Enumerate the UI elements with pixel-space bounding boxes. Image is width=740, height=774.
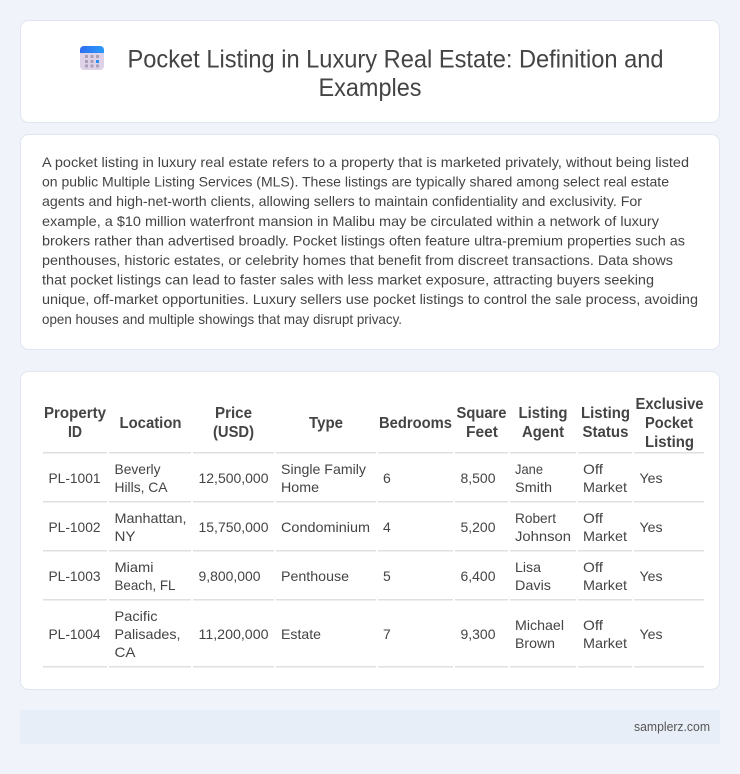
table row: PL-1001: Hills, CA	[114, 479, 168, 495]
footer	[20, 710, 720, 744]
table row: PL-1004: Off	[583, 617, 603, 633]
table row: PL-1004: 7	[383, 626, 391, 642]
table header row	[44, 396, 704, 451]
text block: description paragraph: brokers rather than advertised broadly. Pocket listings often feature ultra-premium properties such as	[42, 232, 685, 248]
table header row: Square	[456, 405, 507, 422]
title: Pocket Listing in Luxury Real Estate: Definition and	[128, 46, 664, 74]
table row: PL-1001: Smith	[515, 479, 552, 495]
table row: PL-1001: PL-1001	[48, 470, 101, 486]
table row: PL-1004: Brown	[515, 635, 555, 651]
table row: PL-1004: Palisades,	[114, 626, 180, 642]
table row: PL-1002: 15,750,000	[198, 519, 269, 535]
table row: PL-1003: 5	[383, 568, 391, 584]
table header row: Type	[309, 415, 343, 432]
table row: PL-1002: 5,200	[460, 519, 496, 535]
table row: PL-1002: Market	[583, 528, 627, 544]
table header row: Listing	[645, 434, 694, 451]
icon: calendar	[80, 46, 104, 70]
table row: PL-1004: Michael	[515, 617, 564, 633]
table row: PL-1004: 11,200,000	[198, 626, 269, 642]
table row: PL-1002: Robert	[515, 510, 556, 526]
table row: PL-1001	[48, 461, 662, 495]
table header row: Listing	[518, 405, 568, 422]
table row: PL-1004: Yes	[640, 626, 662, 642]
table row: PL-1003: Yes	[640, 568, 662, 584]
table row: PL-1001: 6	[383, 470, 391, 486]
panel: description	[20, 134, 720, 350]
text block: description paragraph: that pocket listings can lead to faster sales with less market exposure, attracting buyers seeking	[42, 272, 654, 288]
table header row: Location	[120, 415, 182, 432]
table row: PL-1001: Single Family	[281, 461, 366, 477]
text block: description paragraph: agents and high-net-worth clients, allowing sellers to maintain confidentiality and exclusivity. For	[42, 193, 642, 209]
table header row: Price	[215, 405, 252, 422]
table row: PL-1003: 9,800,000	[198, 568, 261, 584]
table row: PL-1002: Off	[583, 510, 603, 526]
table header row: Status	[582, 424, 629, 441]
text block: description paragraph	[42, 154, 698, 327]
title	[128, 46, 664, 102]
table row: PL-1004: Estate	[281, 626, 321, 642]
table row: PL-1001: Market	[583, 479, 627, 495]
table row: PL-1002: Yes	[640, 519, 662, 535]
panel: table	[20, 372, 720, 690]
table row: PL-1001: Yes	[640, 470, 662, 486]
footer: samplerz.com	[634, 720, 710, 734]
table row: PL-1003: Beach, FL	[114, 577, 176, 593]
table row: PL-1002: 4	[383, 519, 391, 535]
table header row: ID	[68, 424, 82, 441]
table row: PL-1004: Pacific	[114, 608, 158, 624]
text block: description paragraph: penthouses, historic estates, or celebrity homes that benefit from discreet transactions. Data shows	[42, 252, 673, 268]
table row: PL-1002	[48, 510, 662, 544]
table header row: Feet	[466, 424, 499, 441]
table row: PL-1004: 9,300	[460, 626, 496, 642]
table row: PL-1001: Home	[281, 479, 319, 495]
table header row: Pocket	[645, 415, 694, 432]
table row: PL-1002: Condominium	[281, 519, 370, 535]
table row: PL-1002: Johnson	[515, 528, 571, 544]
table header row: Property	[44, 405, 106, 422]
table row: PL-1002: NY	[114, 528, 136, 544]
table row: PL-1001: Beverly	[114, 461, 160, 477]
text block: description paragraph: unique, off-market opportunities. Luxury sellers use pocket listings to control the sale process, avoiding	[42, 291, 698, 307]
table row: PL-1004: Market	[583, 635, 627, 651]
table row: PL-1001: 8,500	[460, 470, 496, 486]
table row: PL-1003: Davis	[515, 577, 551, 593]
text block: description paragraph: A pocket listing in luxury real estate refers to a property that is marketed privately, without being listed	[42, 154, 689, 170]
table header row: Listing	[581, 405, 630, 422]
table row: PL-1004	[48, 608, 662, 660]
table row: PL-1002: Manhattan,	[114, 510, 186, 526]
table row: PL-1003: PL-1003	[48, 568, 101, 584]
table row: PL-1003: Lisa	[515, 559, 541, 575]
text block: description paragraph: example, a $10 million waterfront mansion in Malibu may be circulated within a network of luxury	[42, 213, 659, 229]
table row: PL-1004: CA	[114, 644, 136, 660]
table row: PL-1003: Miami	[114, 559, 154, 575]
table row: PL-1001: 12,500,000	[198, 470, 269, 486]
table row: PL-1001: Jane	[515, 461, 543, 477]
table row: PL-1003: 6,400	[460, 568, 496, 584]
table row: PL-1003: Off	[583, 559, 603, 575]
table row: PL-1002: PL-1002	[48, 519, 101, 535]
table row: PL-1004: PL-1004	[48, 626, 101, 642]
title: Examples	[318, 74, 422, 102]
table row: PL-1003: Penthouse	[281, 568, 349, 584]
text block: description paragraph: on public Multiple Listing Services (MLS). These listings are typically shared among select real estate	[42, 174, 669, 190]
table header row: (USD)	[213, 424, 254, 441]
table header row: Exclusive	[636, 396, 704, 413]
table header row: Agent	[522, 424, 565, 441]
table row: PL-1003: Market	[583, 577, 627, 593]
table row: PL-1003	[48, 559, 662, 593]
table row: PL-1001: Off	[583, 461, 603, 477]
text block: description paragraph: open houses and multiple showings that may disrupt privacy.	[42, 311, 402, 327]
table header row: Bedrooms	[379, 415, 452, 432]
panel: header	[20, 20, 720, 122]
